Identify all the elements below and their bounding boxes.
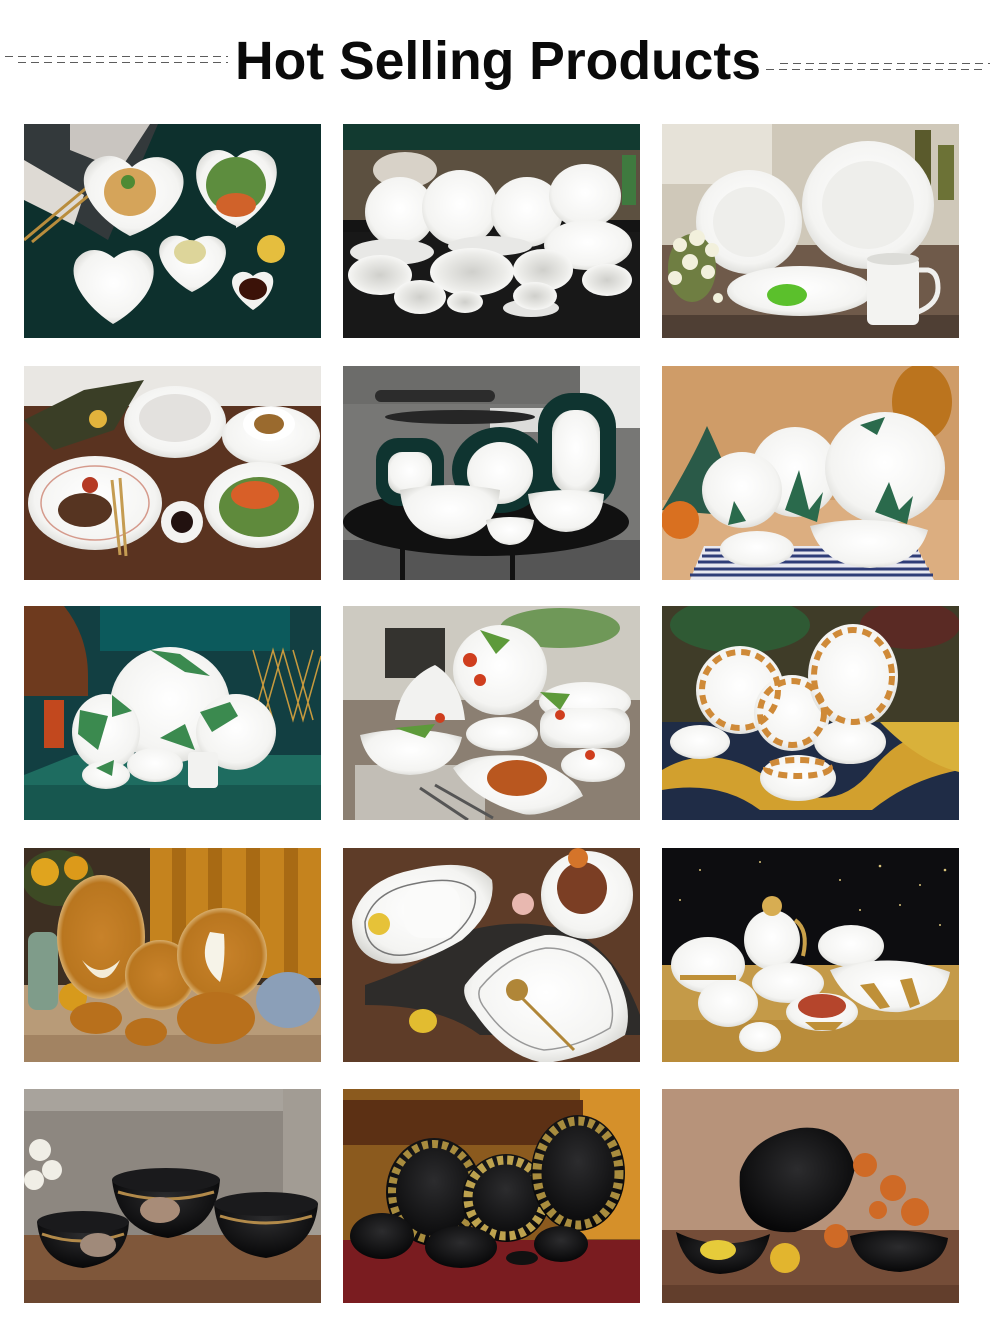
plate and teapot bbox=[360, 625, 547, 775]
panel: black bowls with gold flowers bbox=[24, 1089, 321, 1303]
vase and sunflowers bbox=[22, 850, 94, 1011]
mug bbox=[188, 752, 218, 788]
plate wells bbox=[713, 161, 914, 257]
pumpkin bbox=[892, 364, 952, 440]
gold decoration bbox=[42, 1192, 312, 1257]
candle bbox=[512, 893, 534, 915]
fruit bbox=[798, 994, 846, 1018]
panel: black leaf-shaped plate on wood bbox=[662, 1089, 959, 1303]
blue flowers bbox=[256, 972, 320, 1028]
leaf decorations bbox=[728, 417, 913, 525]
black bowls bbox=[350, 1213, 588, 1268]
plates bbox=[702, 412, 945, 528]
panel: gold rim plates with sunflowers bbox=[24, 848, 321, 1062]
plates bbox=[696, 141, 934, 316]
teal table bbox=[24, 755, 321, 820]
gold plates bbox=[57, 875, 267, 1010]
stars bbox=[679, 861, 946, 926]
panel: grey-rimmed white plates on dark wood bbox=[343, 848, 640, 1062]
salad bowl bbox=[204, 462, 314, 548]
black round table bbox=[343, 488, 629, 580]
black gold plates bbox=[386, 1115, 625, 1246]
mug bbox=[867, 253, 938, 325]
heart sauce dish bbox=[232, 272, 273, 310]
flowers bbox=[668, 230, 723, 303]
panel: green-rimmed square plates on black table bbox=[343, 366, 640, 580]
small bowls bbox=[466, 717, 625, 782]
small heart dish bbox=[159, 236, 226, 292]
panel: white plates and mug on wooden table bbox=[662, 124, 959, 338]
orange flowers bbox=[824, 1153, 929, 1248]
panel: red berry white dinnerware on rustic table bbox=[343, 606, 640, 820]
lemon bbox=[409, 1009, 437, 1033]
bowls bbox=[720, 520, 928, 568]
fork and knife bbox=[420, 785, 493, 820]
panel: white heart-shaped dishes on dark green bbox=[24, 124, 321, 338]
oval plate with square dish bbox=[352, 865, 493, 964]
white bowls bbox=[400, 485, 604, 545]
orange bbox=[661, 501, 699, 539]
leaves bbox=[78, 650, 238, 776]
black leaf plate bbox=[740, 1128, 855, 1232]
title with dashed rules: Hot Selling Products bbox=[235, 31, 761, 91]
heart bowl with salad bbox=[196, 150, 277, 228]
green gourd bbox=[662, 426, 737, 516]
plates bbox=[72, 647, 276, 789]
lemon bbox=[257, 235, 285, 263]
plate with pasta bbox=[222, 406, 320, 466]
mirror bbox=[24, 606, 88, 696]
striped cloth bbox=[690, 546, 934, 580]
bowls and cups bbox=[348, 236, 632, 317]
plates bbox=[670, 624, 898, 801]
panel: orange-leaf plates on navy and gold cloth bbox=[662, 606, 959, 820]
white and gold bowls bbox=[671, 925, 950, 1052]
gold stripes bbox=[680, 975, 920, 1030]
teapot bbox=[744, 896, 805, 970]
rounded square plate bbox=[464, 935, 628, 1063]
plate with food bbox=[541, 848, 633, 939]
white bowl bbox=[124, 386, 226, 458]
black spoon bbox=[506, 1251, 538, 1265]
oval plate with bread bbox=[453, 755, 583, 815]
red and green pattern bbox=[395, 630, 595, 760]
orange rim patterns bbox=[702, 630, 892, 776]
panel: tropical leaf plates on orange background bbox=[662, 366, 959, 580]
black bowls bbox=[676, 1230, 948, 1274]
panel: palm leaf plates on teal table bbox=[24, 606, 321, 820]
plates bbox=[365, 164, 632, 270]
white flowers bbox=[24, 1139, 62, 1190]
dark green plates bbox=[376, 393, 616, 513]
patterned tablecloth bbox=[662, 722, 959, 820]
dinner plate with steak bbox=[28, 456, 162, 556]
gold lattice bbox=[253, 650, 321, 720]
black bowls bbox=[37, 1168, 318, 1268]
covered casserole bbox=[539, 682, 631, 748]
panel: embossed white dinnerware set on black bbox=[343, 124, 640, 338]
panel: black plates with gold rim on red cloth bbox=[343, 1089, 640, 1303]
green garnish bbox=[767, 284, 807, 306]
dark linen cloth bbox=[365, 924, 640, 1035]
heart plate with spaghetti bbox=[84, 156, 184, 236]
sauce dish bbox=[161, 501, 203, 543]
lemon bbox=[770, 1243, 800, 1273]
panel: red-rimmed white plates with food on dark wood bbox=[24, 366, 321, 580]
gold table bbox=[662, 965, 959, 1062]
gold bowls bbox=[70, 992, 255, 1046]
large empty heart bowl bbox=[74, 250, 154, 324]
panel: gold and white tea set on starry black bbox=[662, 848, 959, 1062]
